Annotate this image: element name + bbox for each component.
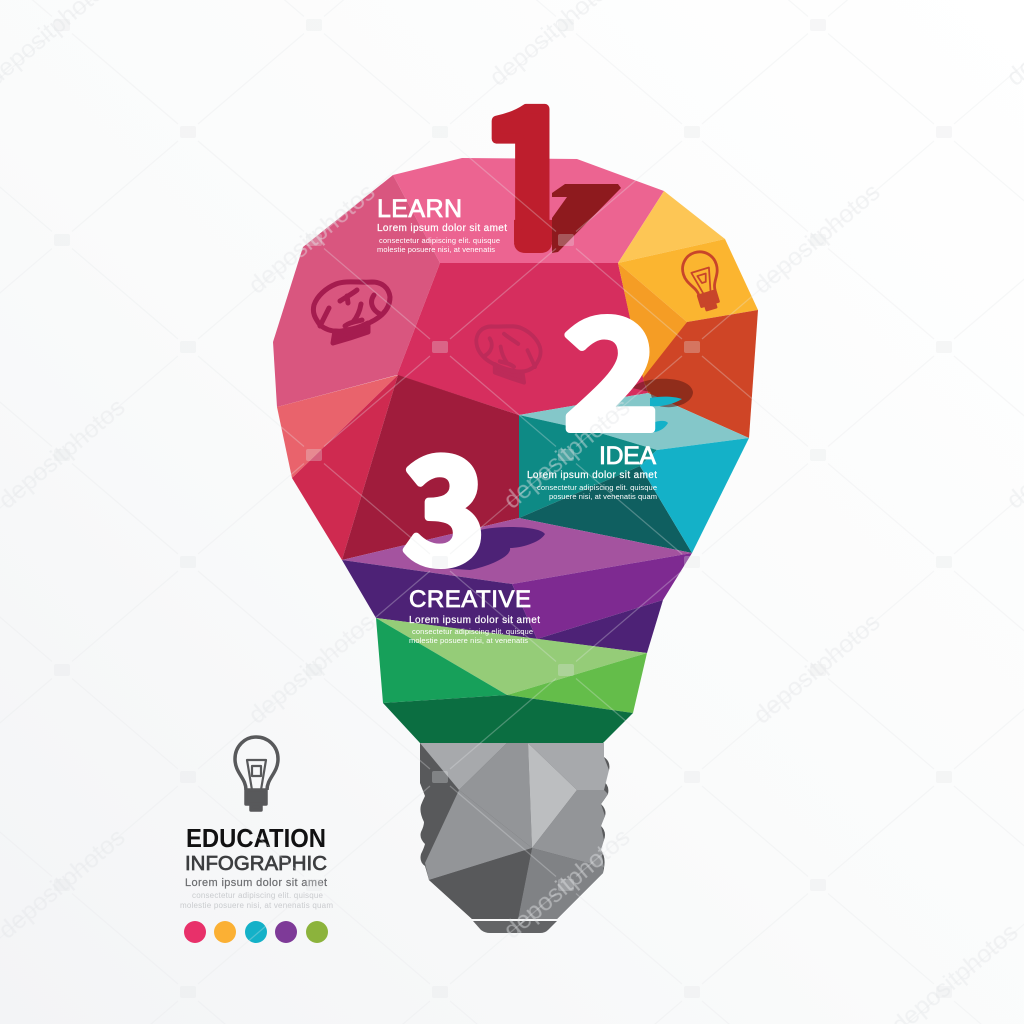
watermark text: depositphotos xyxy=(243,178,380,300)
text block: idea: IDEA xyxy=(599,442,656,470)
watermark text: depositphotos xyxy=(243,608,380,730)
light bulb xyxy=(273,158,758,933)
number 3: 3 xyxy=(403,395,485,605)
panel: idea, orange facets xyxy=(618,191,758,438)
panel: learn, top pink facets xyxy=(273,158,664,560)
panel: grey screw base xyxy=(420,743,609,933)
text block: learn xyxy=(377,195,507,254)
text block: idea: Lorem ipsum dolor sit amet xyxy=(527,470,657,481)
panel: creative, purple facets xyxy=(342,518,692,653)
title: education infographic xyxy=(180,823,333,910)
icon: brain, outlined xyxy=(313,282,390,343)
legend: colour dots xyxy=(184,921,328,943)
text block: creative: Lorem ipsum dolor sit amet xyxy=(409,615,540,626)
text block: creative: molestie posuere nisi, at venenatis xyxy=(409,636,528,645)
text block: idea: posuere nisi, at venenatis quam xyxy=(549,492,657,501)
number 2: 2 xyxy=(563,255,659,473)
text block: learn: consectetur adipiscing elit. quisque xyxy=(379,236,500,245)
shadow of number 3 xyxy=(440,527,545,570)
title: education infographic: INFOGRAPHIC xyxy=(185,853,327,875)
watermark text: depositphotos xyxy=(748,608,885,730)
number 1: 1 xyxy=(478,24,580,304)
text block: learn: Lorem ipsum dolor sit amet xyxy=(377,223,507,234)
icon: light bulb in orange facet xyxy=(678,248,728,313)
icon: light bulb outline xyxy=(235,737,278,810)
text block: idea xyxy=(527,442,657,501)
watermark text: depositphotos xyxy=(498,823,635,945)
text block: creative: consectetur adipiscing elit. quisque xyxy=(412,627,533,636)
watermark text: depositphotos xyxy=(748,178,885,300)
title: education infographic: Lorem ipsum dolor sit amet xyxy=(185,877,327,889)
panel: green facets xyxy=(376,618,647,743)
title: education infographic: molestie posuere nisi, at venenatis quam xyxy=(180,901,333,910)
text block: idea: consectetur adipiscing elit. quisque xyxy=(537,483,657,492)
panel: idea, teal facets xyxy=(519,393,749,553)
shadow of number 2 on teal xyxy=(650,397,682,432)
shadow of number 1 xyxy=(552,184,621,253)
watermark text: depositphotos xyxy=(498,393,635,515)
text block: learn: LEARN xyxy=(377,195,462,223)
title: education infographic: consectetur adipiscing elit. quisque xyxy=(192,891,324,900)
icon: brain, faint xyxy=(476,326,541,383)
shadow of number 2 xyxy=(632,379,693,407)
text block: creative: CREATIVE xyxy=(409,586,531,613)
text block: creative xyxy=(409,586,540,645)
text block: learn: molestie posuere nisi, at venenatis xyxy=(377,245,495,254)
title: education infographic: EDUCATION xyxy=(186,823,326,853)
